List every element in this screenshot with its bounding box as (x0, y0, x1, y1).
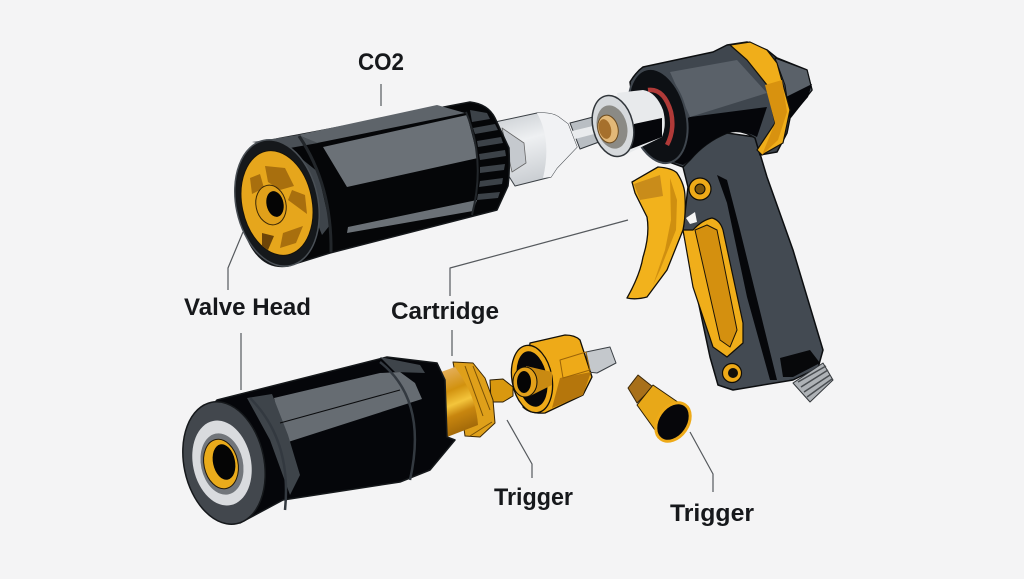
barrel highlight (670, 60, 767, 117)
body seams (250, 362, 415, 510)
grip inlay (683, 218, 743, 357)
fitting body (637, 385, 688, 437)
barrel dark opening (619, 63, 697, 169)
ribbed end (470, 110, 506, 200)
threaded tip (628, 375, 653, 403)
part: small brass fitting (628, 375, 697, 448)
part: top cartridge (224, 102, 599, 274)
part: bottom cartridge (172, 357, 513, 532)
brass stem (490, 379, 513, 402)
nut opening (506, 342, 558, 416)
inner tube (513, 366, 552, 397)
yellow valve face (224, 132, 330, 274)
barrel (630, 42, 812, 167)
yellow collar (730, 42, 790, 155)
trigger (627, 167, 685, 299)
nut relief (560, 352, 590, 378)
label: Trigger left: Trigger (494, 484, 573, 511)
silver coupling (495, 113, 599, 186)
screw lower (722, 364, 742, 382)
cartridge body (190, 357, 455, 523)
part: gold nut (506, 335, 616, 416)
red ring (648, 90, 672, 145)
grip base block (780, 350, 820, 377)
nose (775, 58, 812, 118)
body highlights (247, 357, 425, 495)
screw upper (689, 178, 711, 200)
threaded end (793, 363, 833, 402)
part: spray gun (586, 42, 833, 402)
barrel black band (650, 107, 767, 165)
bottom face (172, 394, 276, 532)
silver nozzle (586, 90, 665, 161)
brass collar (427, 362, 495, 437)
label: CO2: CO2 (358, 49, 404, 76)
fitting opening (649, 396, 697, 448)
silver hex (586, 347, 616, 373)
label: Trigger right: Trigger (670, 500, 754, 527)
nut interior (512, 349, 552, 409)
grip stripe (717, 175, 777, 380)
label: Valve Head: Valve Head (184, 294, 311, 321)
nut body (523, 335, 592, 413)
band line (280, 390, 400, 423)
nut shadow (552, 372, 591, 408)
label: Cartridge: Cartridge (391, 298, 499, 325)
body highlights (252, 105, 478, 252)
notch (686, 212, 697, 224)
leader lines (228, 84, 713, 492)
cartridge body (237, 102, 509, 266)
grip (683, 133, 823, 390)
